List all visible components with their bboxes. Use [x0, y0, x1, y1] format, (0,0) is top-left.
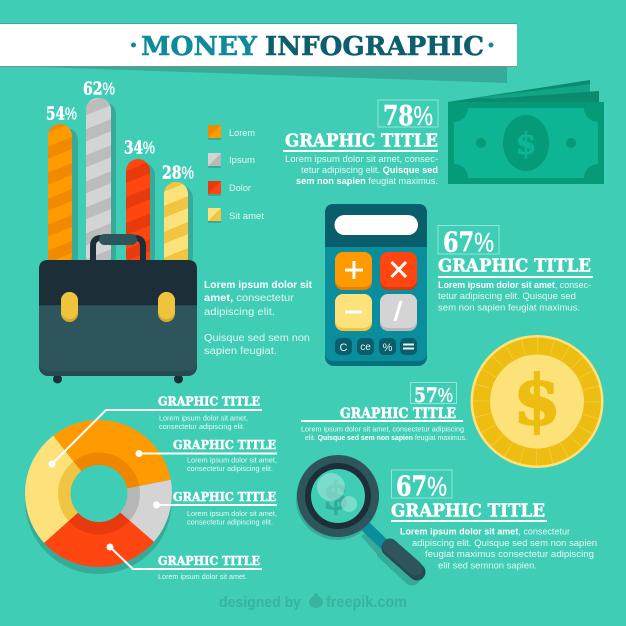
icon: magnifying glass: [296, 455, 417, 577]
legend: Dolor: [229, 183, 251, 194]
icon: gold coin: $: [513, 361, 561, 441]
callout: 78%: Lorem ipsum dolor sit amet, consec-: [285, 154, 438, 165]
bar chart: 28%: [162, 162, 194, 184]
donut label 1: [158, 394, 260, 431]
legend: Sit amet: [229, 211, 264, 222]
callout: 67% magnifier: GRAPHIC TITLE: [391, 502, 545, 522]
donut label 2: GRAPHIC TITLE: [173, 437, 276, 452]
icon: banknotes: $: [516, 127, 536, 162]
bar chart: 62%: [83, 78, 115, 100]
callout: 67% magnifier: elit sed semnon sapien.: [438, 560, 537, 572]
bar chart: 34%: [124, 138, 155, 158]
donut label 3: GRAPHIC TITLE: [173, 489, 276, 504]
text block: briefcase: sapien feugiat.: [204, 345, 277, 357]
callout: 78%: [283, 100, 438, 187]
icon: calculator: %: [383, 342, 393, 354]
donut label 2: [173, 437, 277, 473]
watermark: [219, 593, 407, 611]
callout: 67% calculator: sem non sapien feugiat maximus.: [438, 302, 580, 314]
donut label 3: [173, 489, 277, 526]
watermark: designed by: [219, 595, 301, 611]
title banner: MONEY: [141, 32, 257, 62]
icon: calculator: [325, 204, 427, 366]
icon: banknotes: [448, 80, 604, 184]
leader lines: [48, 410, 277, 569]
legend: Ipsum: [229, 155, 255, 166]
title banner: [0, 23, 517, 83]
donut chart: [25, 420, 172, 574]
callout: 67% magnifier: Lorem ipsum dolor sit amet, consectetur: [400, 526, 570, 538]
callout: 78%: sem non sapien feugiat maximus.: [296, 176, 438, 187]
text block: briefcase: adipiscing elit.: [204, 306, 275, 318]
callout: 67% calculator: Lorem ipsum dolor sit amet, consec-: [438, 280, 591, 291]
callout: 57%: [301, 382, 467, 442]
donut label 1: consectetur adipiscing elit.: [159, 424, 245, 431]
callout: 57%: elit. Quisque sed sem non sapien feugiat maximus.: [305, 433, 467, 442]
bar chart: [46, 78, 194, 268]
donut label 3: consectetur adipiscing elit.: [187, 520, 273, 526]
text block: briefcase: Lorem ipsum dolor sit: [204, 279, 312, 291]
callout: 67% magnifier: feugiat maximus consectetur adipiscing: [425, 549, 594, 560]
icon: gold coin: [470, 335, 604, 468]
donut label 3: Lorem ipsum dolor sit amet,: [187, 511, 277, 518]
callout: 78%: tetur adipiscing elit. Quisque sed: [301, 165, 438, 176]
callout: 67% magnifier: 67%: [396, 472, 447, 502]
donut label 4: Lorem ipsum dolor sit amet.: [158, 574, 247, 581]
text block: briefcase: [204, 279, 312, 357]
callout: 67% calculator: GRAPHIC TITLE: [438, 256, 591, 276]
callout: 57%: GRAPHIC TITLE: [340, 406, 456, 422]
donut label 1: Lorem ipsum dolor sit amet,: [159, 416, 248, 422]
text block: briefcase: amet, consectetur: [204, 292, 295, 304]
donut label 4: [158, 553, 260, 581]
icon: calculator: ce: [360, 342, 371, 353]
donut label 1: GRAPHIC TITLE: [158, 394, 260, 408]
callout: 67% magnifier: adipiscing elit. Quisque sed sem non sapien: [412, 538, 597, 549]
legend: Lorem: [229, 128, 255, 139]
callout: 67% magnifier: [391, 470, 597, 572]
callout: 67% calculator: 67%: [443, 228, 494, 258]
icon: magnifying glass: $: [323, 473, 349, 518]
watermark: freepik.com: [326, 594, 407, 611]
donut label 2: consectetur adipiscing elit.: [187, 466, 273, 473]
icon: calculator: C: [340, 342, 348, 354]
legend: [208, 125, 264, 223]
donut label 4: GRAPHIC TITLE: [158, 553, 260, 568]
bar chart: 54%: [46, 104, 77, 124]
text block: briefcase: Quisque sed sem non: [204, 332, 310, 344]
icon: briefcase: [39, 234, 197, 384]
title banner: INFOGRAPHIC: [265, 32, 484, 62]
callout: 67% calculator: tetur adipiscing elit. Quisque sed: [438, 291, 576, 302]
callout: 78%: 78%: [383, 101, 433, 132]
callout: 57%: Lorem ipsum dolor sit amet, consectetur adipiscing: [301, 424, 464, 434]
callout: 57%: 57%: [414, 383, 453, 407]
callout: 78%: GRAPHIC TITLE: [285, 132, 438, 152]
donut label 2: Lorem ipsum dolor sit amet,: [187, 458, 277, 464]
callout: 67% calculator: [438, 226, 593, 314]
